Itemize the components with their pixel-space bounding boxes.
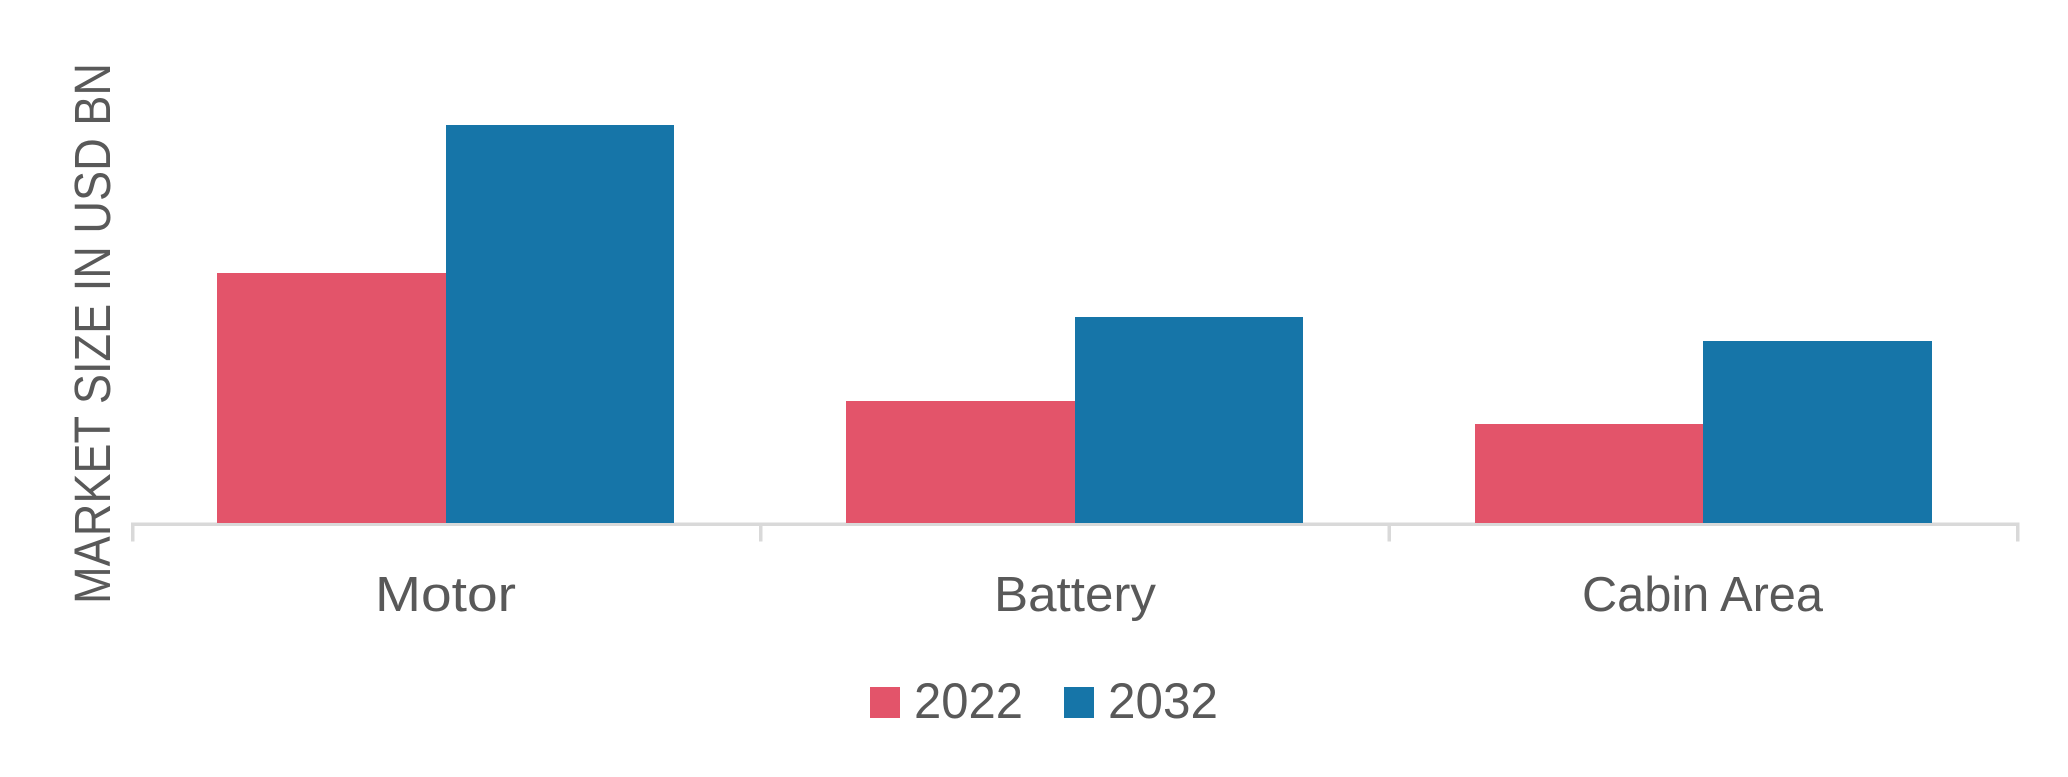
- category label: Cabin Area: Cabin Area: [1582, 568, 1824, 622]
- category label: Motor: Motor: [375, 568, 516, 622]
- legend swatch: 2032: [1064, 687, 1094, 718]
- bars: Battery: [846, 317, 1303, 523]
- legend swatch: 2022: [870, 687, 900, 718]
- y axis title: MARKET SIZE IN USD BN: [64, 63, 121, 604]
- legend label: 2032: 2032: [1108, 673, 1218, 729]
- bars: Motor: [217, 125, 674, 523]
- legend label: 2022: 2022: [914, 673, 1023, 729]
- category label: Battery: Battery: [994, 568, 1157, 622]
- x axis line with ticks: [131, 522, 2020, 542]
- bars: Cabin Area: [1475, 341, 1932, 523]
- legend: [870, 673, 1218, 729]
